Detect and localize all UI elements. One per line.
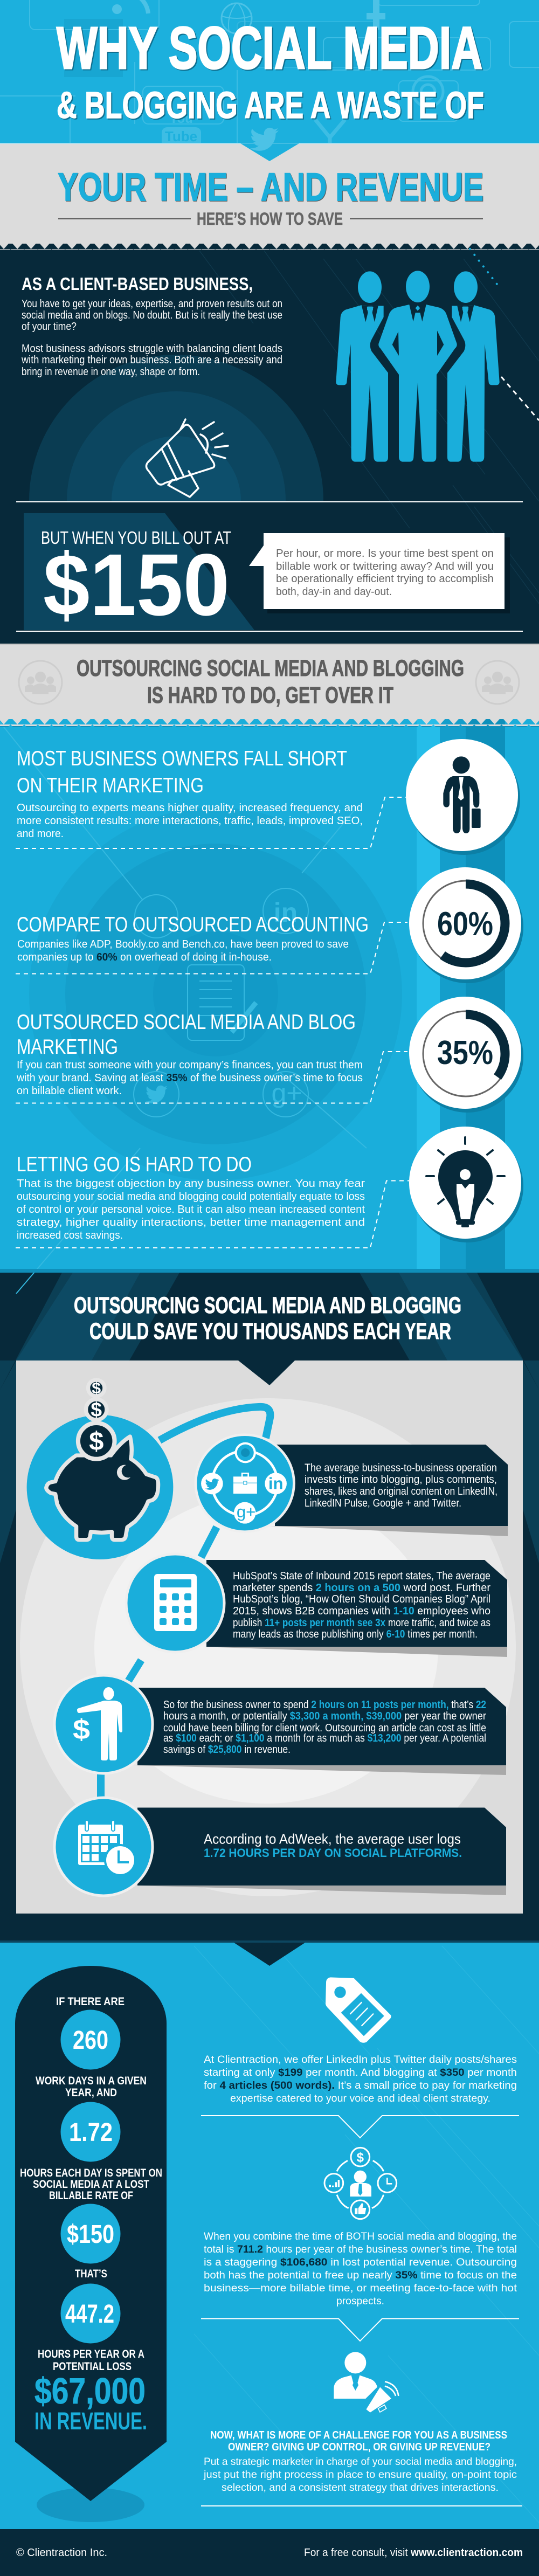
- point 4: That is the biggest objection by any business owner. You may fear: [17, 1178, 365, 1190]
- subtitle: HERE’S HOW TO SAVE: [197, 209, 343, 229]
- stat labels: THAT’S: [75, 2268, 107, 2280]
- stat labels: [20, 1995, 162, 2373]
- point 3: on billable client work.: [17, 1085, 122, 1097]
- offer text: for 4 articles (500 words). It’s a small price to pay for marketing: [204, 2080, 517, 2091]
- point 4: outsourcing your social media and blogging could potentially equate to loss: [17, 1191, 365, 1203]
- intro text: [21, 298, 282, 378]
- stat 447.2: 447.2: [65, 2300, 114, 2329]
- notch arrow with bird: [240, 128, 299, 161]
- icon: piggy bank: $: [92, 1380, 101, 1397]
- card 4: 1.72 HOURS PER DAY ON SOCIAL PLATFORMS.: [204, 1846, 462, 1860]
- concentric circles: [29, 355, 323, 501]
- stat 1.72: 1.72: [69, 2118, 113, 2147]
- dotted connector: [470, 249, 499, 286]
- icon: piggy bank: $: [91, 1399, 102, 1421]
- in revenue: IN REVENUE.: [34, 2407, 147, 2435]
- ghost circles: g+: [271, 1078, 302, 1108]
- icon: three businessmen: [336, 271, 500, 462]
- intro text: with marketing their own business. Both are a necessity and: [21, 354, 282, 366]
- stat labels: BILLABLE RATE OF: [49, 2190, 133, 2202]
- consult link: For a free consult, visit www.clientraction.com: [304, 2547, 523, 2559]
- chart: 60 percent donut: [409, 867, 523, 983]
- card 2: 2015, shows B2B companies with 1-10 employees who: [233, 1605, 490, 1617]
- heading: [74, 1293, 461, 1344]
- card 3: could have been billing for client work. Outsourcing an article can cost as little: [163, 1722, 486, 1734]
- point 1: MOST BUSINESS OWNERS FALL SHORT: [17, 747, 347, 770]
- point 3: OUTSOURCED SOCIAL MEDIA AND BLOG: [17, 1011, 356, 1034]
- header ghost social icons: You: [169, 112, 193, 126]
- point 2: companies up to 60% on overhead of doing it in-house.: [17, 951, 272, 963]
- point 4: of control or your personal voice. But it can also mean increased content: [17, 1204, 365, 1216]
- panel: section band hard to do: [0, 644, 539, 719]
- heading: IS HARD TO DO, GET OVER IT: [147, 682, 393, 708]
- ghost circles: [0, 722, 402, 1294]
- stat labels: HOURS EACH DAY IS SPENT ON: [20, 2167, 162, 2179]
- card 1: invests time into blogging, plus comments,: [305, 1474, 497, 1486]
- panel notch: [238, 1360, 295, 1385]
- panel: revenue banner: [15, 1966, 167, 2522]
- stat 150: $150: [67, 2220, 114, 2249]
- intro text: of your time?: [22, 321, 77, 333]
- intro text: Most business advisors struggle with balancing client loads: [22, 343, 282, 355]
- icon: piggy bank: $: [89, 1427, 103, 1456]
- challenge heading: [210, 2429, 507, 2453]
- offer text: expertise catered to your voice and ideal client strategy.: [230, 2093, 490, 2104]
- copyright: © Clientraction Inc.: [16, 2547, 107, 2559]
- notch arrow: [234, 1943, 305, 1966]
- icon: person with four benefits: [324, 2147, 397, 2219]
- offer text: starting at only $199 per month. And blogging at $350 per month: [204, 2067, 517, 2078]
- icon: social network circle: g+: [237, 1502, 255, 1521]
- rule bottom: [16, 631, 523, 632]
- point 2: [16, 913, 407, 973]
- icon: social network circle: in: [268, 1474, 283, 1493]
- icon: calculator: [126, 1554, 224, 1652]
- header ghost social icons: Tube: [165, 128, 197, 144]
- point 1: [16, 747, 406, 848]
- combined time text: both has the potential to free up nearly 35% time to focus on the: [204, 2270, 517, 2281]
- stat 260: [60, 2009, 121, 2070]
- vertical stripes: [417, 719, 505, 1270]
- point 1: more consistent results: more interactions, traffic, leads, improved SEO,: [17, 815, 363, 827]
- stat labels: YEAR, AND: [65, 2087, 117, 2099]
- rate label: BUT WHEN YOU BILL OUT AT: [41, 528, 231, 548]
- icon: man with dollar: $: [73, 1714, 90, 1745]
- icon: person with megaphone: [334, 2352, 398, 2413]
- chart: 35 percent donut: 35%: [437, 1034, 493, 1072]
- combined time text: prospects.: [336, 2296, 384, 2307]
- grey panel: [16, 1360, 523, 1914]
- challenge text: just put the right process in place to ensure quality, on-point topic: [203, 2469, 517, 2481]
- point 1: ON THEIR MARKETING: [17, 774, 204, 797]
- callout: Per hour, or more. Is your time best spent on: [276, 548, 494, 560]
- challenge text: selection, and a consistent strategy that drives interactions.: [222, 2482, 499, 2494]
- offer text: At Clientraction, we offer LinkedIn plus Twitter daily posts/shares: [204, 2054, 517, 2066]
- stat 447.2: [60, 2283, 121, 2344]
- header ghost social icons: [0, 0, 539, 143]
- offer text: [204, 2054, 517, 2104]
- intro text: You have to get your ideas, expertise, and proven results out on: [22, 298, 282, 310]
- chart: 35 percent donut: [409, 997, 523, 1113]
- point 3: [16, 1011, 407, 1103]
- intro text: bring in revenue in one way, shape or form.: [22, 366, 200, 378]
- panel: outsourcing points: [0, 719, 539, 1294]
- callout: billable work or twittering away? And will you: [276, 561, 494, 572]
- panel: header: [0, 0, 539, 143]
- combined time text: [204, 2231, 517, 2307]
- icon: ghost people right: [476, 661, 519, 704]
- icon: social network circle: [196, 1435, 294, 1532]
- card 3: [134, 1688, 506, 1775]
- connectors: [101, 1407, 270, 1800]
- banner shadow: [37, 2488, 144, 2522]
- callout: [249, 533, 510, 613]
- panel: savings and CTA: [0, 1940, 539, 2529]
- panel: billing rate: [16, 501, 523, 634]
- point 3: If you can trust someone with your company’s finances, you can trust them: [17, 1059, 363, 1071]
- stat labels: SOCIAL MEDIA AT A LOST: [33, 2178, 149, 2191]
- heading: AS A CLIENT-BASED BUSINESS,: [22, 274, 253, 294]
- rule top: [16, 501, 523, 502]
- intro text: social media and on blogs. No doubt. But is it really the best use: [22, 309, 282, 321]
- subtitle rule right: [350, 218, 483, 219]
- stat labels: IF THERE ARE: [56, 1995, 125, 2008]
- panel: client-based business: [21, 249, 539, 604]
- card 2: HubSpot’s blog, “How Often Should Companies Blog” April: [233, 1593, 490, 1605]
- point 4: increased cost savings.: [17, 1230, 123, 1241]
- combined time text: When you combine the time of BOTH social media and blogging, the: [204, 2231, 517, 2242]
- stat labels: POTENTIAL LOSS: [53, 2360, 132, 2373]
- icon: piggy bank: [27, 1380, 173, 1559]
- potential loss figure: $67,000: [34, 2371, 146, 2412]
- icon: megaphone: [146, 419, 228, 497]
- point 4: [16, 1153, 409, 1248]
- stat 1.72: [60, 2102, 121, 2161]
- card 1: The average business-to-business operation: [305, 1462, 497, 1474]
- icon: calendar and clock: [54, 1798, 153, 1896]
- card 3: hours a month, or potentially $3,300 a month, $39,000 per year the owner: [163, 1710, 486, 1722]
- combined time text: is a staggering $106,680 in lost potential revenue. Outsourcing: [204, 2257, 517, 2268]
- rate figure: $150: [43, 535, 230, 634]
- divider arrow 2: [201, 2319, 519, 2341]
- challenge text: Put a strategic marketer in charge of your social media and blogging,: [204, 2456, 517, 2468]
- dashed connector: [501, 377, 539, 420]
- point 3: with your brand. Saving at least 35% of the business owner’s time to focus: [16, 1072, 363, 1084]
- icon: man with dollar: [54, 1675, 153, 1773]
- card 1: LinkedIN Pulse, Google + and Twitter.: [305, 1497, 461, 1509]
- spotlight rays: [0, 1273, 539, 1563]
- card 2: publish 11+ posts per month see 3x more traffic, and twice as: [233, 1617, 490, 1629]
- card 2: many leads as those publishing only 6-10 times per month.: [233, 1628, 478, 1640]
- subtitle rule left: [58, 218, 191, 219]
- point 1: and more.: [17, 828, 64, 840]
- stat 260: 260: [73, 2026, 108, 2055]
- heading: [77, 655, 464, 708]
- point 3: MARKETING: [17, 1035, 118, 1059]
- icon: light bulb: [409, 1127, 523, 1242]
- icon: ghost people left: [19, 661, 62, 704]
- challenge heading: OWNER? GIVING UP CONTROL, OR GIVING UP REVENUE?: [228, 2441, 490, 2453]
- icon: businessman with briefcase: [406, 739, 520, 855]
- callout: both, day-in and day-out.: [276, 586, 392, 598]
- card 2: HubSpot’s State of Inbound 2015 report states, The average: [233, 1570, 490, 1582]
- card 1: shares, likes and original content on LinkedIN,: [305, 1486, 497, 1497]
- card 2: [201, 1560, 507, 1657]
- closing rule: [201, 2505, 522, 2506]
- stat 150: [60, 2204, 121, 2264]
- icon: person with four benefits: $: [357, 2151, 364, 2165]
- diagonal strokes: [199, 251, 539, 604]
- card 1: [270, 1445, 508, 1536]
- point 4: strategy, higher quality interactions, better time management and: [17, 1217, 365, 1228]
- callout: be operationally efficient trying to accomplish: [276, 573, 494, 585]
- point 2: Companies like ADP, Bookly.co and Bench.co, have been proved to save: [17, 938, 349, 950]
- panel: title continuation: [0, 128, 539, 250]
- point 4: LETTING GO IS HARD TO DO: [17, 1153, 252, 1176]
- card 3: savings of $25,800 in revenue.: [163, 1744, 291, 1756]
- rate background: [24, 513, 254, 630]
- card 3: So for the business owner to spend 2 hours on 11 posts per month, that’s 22: [163, 1699, 486, 1711]
- stat labels: HOURS PER YEAR OR A: [38, 2348, 144, 2360]
- card 2: marketer spends 2 hours on a 500 word post. Further: [233, 1582, 490, 1594]
- combined time text: business—more billable time, or meeting face-to-face with hot: [204, 2283, 517, 2294]
- stat labels: WORK DAYS IN A GIVEN: [36, 2075, 147, 2087]
- footer: [0, 2529, 539, 2576]
- icon: price tag: [326, 1977, 391, 2043]
- point 2: COMPARE TO OUTSOURCED ACCOUNTING: [17, 913, 369, 936]
- combined time text: total is 711.2 hours per year of the business owner’s time. The total: [204, 2244, 517, 2255]
- chart: 60 percent donut: 60%: [437, 906, 493, 943]
- ghost circles: in: [274, 897, 298, 928]
- card 3: as $100 each; or $1,100 a month for as much as $13,200 per year. A potential: [163, 1732, 486, 1744]
- divider arrow 1: [201, 2116, 519, 2138]
- point 1: Outsourcing to experts means higher quality, increased frequency, and: [17, 802, 363, 814]
- card 4: According to AdWeek, the average user logs: [204, 1831, 461, 1847]
- challenge text: [203, 2456, 517, 2494]
- card 4: [134, 1808, 506, 1895]
- panel: save thousands: [0, 1273, 539, 1914]
